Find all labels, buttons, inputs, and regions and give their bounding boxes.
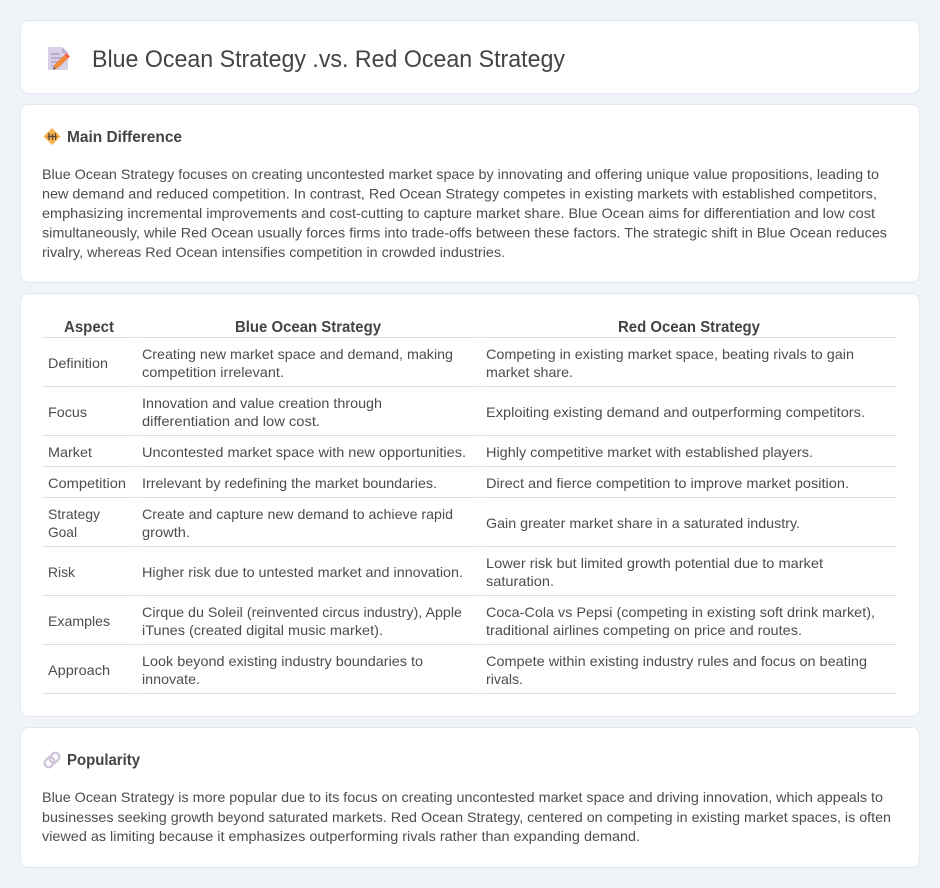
row: definition: Competing in existing market space, beating rivals to gain (486, 346, 854, 362)
panel: comparison table (20, 294, 920, 716)
row: approach: Look beyond existing industry boundaries to (142, 653, 423, 669)
row: strategy goal: Strategy (48, 506, 100, 522)
row: strategy goal: Goal (48, 524, 77, 540)
row: examples (48, 604, 875, 638)
row: strategy goal: Gain greater market share in a saturated industry. (486, 515, 800, 531)
row: focus: Focus (48, 404, 87, 420)
icon: orange diamond sign (44, 128, 60, 145)
table header: Blue Ocean Strategy (235, 319, 381, 336)
row: competition: Irrelevant by redefining the market boundaries. (142, 475, 437, 491)
icon: memo with pencil (48, 47, 70, 70)
row: examples: iTunes (created digital music market). (142, 622, 383, 638)
row: risk: Higher risk due to untested market and innovation. (142, 564, 463, 580)
heading: popularity: Popularity (67, 752, 140, 769)
row: definition: competition irrelevant. (142, 364, 284, 380)
row: strategy goal (48, 506, 800, 540)
row: examples: Cirque du Soleil (reinvented circus industry), Apple (142, 604, 462, 620)
row: market: Market (48, 444, 92, 460)
text block: main difference paragraph: emphasizing incremental improvements and cost-cutting to capture market share. Blue Ocean aims for differentiation and low cost (42, 205, 875, 221)
row: strategy goal: growth. (142, 524, 190, 540)
text block: main difference paragraph: simultaneously, while Red Ocean usually forces firms into trade-offs between these factors. The strategic shift in Blue Ocean reduces (42, 224, 887, 240)
table header: Aspect (64, 319, 115, 336)
icon: chain link (43, 751, 61, 769)
panel: title card (20, 20, 920, 94)
table header: Red Ocean Strategy (618, 319, 760, 336)
row: competition (48, 475, 849, 491)
row: approach: Compete within existing industry rules and focus on beating (486, 653, 867, 669)
row: competition: Competition (48, 475, 126, 491)
panel: main difference (20, 104, 920, 282)
row: examples: Examples (48, 613, 110, 629)
row: approach (48, 653, 867, 687)
row: definition: Definition (48, 355, 108, 371)
row: risk: Risk (48, 564, 76, 580)
text block: main difference paragraph: new demand and reduced competition. In contrast, Red Ocean Strategy competes in existing markets with established competitors, (42, 186, 877, 202)
row: focus: Innovation and value creation through (142, 395, 382, 411)
row: market (48, 444, 813, 460)
row: examples: traditional airlines competing on price and routes. (486, 622, 802, 638)
row: risk: saturation. (486, 573, 554, 589)
title: Blue Ocean Strategy .vs. Red Ocean Strategy (92, 46, 565, 73)
row: market: Highly competitive market with established players. (486, 444, 813, 460)
row: competition: Direct and fierce competition to improve market position. (486, 475, 849, 491)
text block: popularity paragraph: businesses seeking growth beyond saturated markets. Red Ocean Strategy, centered on competing in existing market spaces, is often (42, 809, 891, 825)
text block: main difference paragraph: rivalry, whereas Red Ocean intensifies competition in crowded industries. (42, 244, 505, 260)
text block: popularity paragraph: viewed as limiting because it emphasizes outperforming rivals rather than expanding demand. (42, 828, 640, 844)
row: approach: rivals. (486, 671, 523, 687)
row: focus (48, 395, 865, 429)
row: definition: Creating new market space and demand, making (142, 346, 453, 362)
row: approach: innovate. (142, 671, 200, 687)
row: strategy goal: Create and capture new demand to achieve rapid (142, 506, 453, 522)
heading: main difference: Main Difference (67, 129, 182, 146)
text block: main difference paragraph (42, 166, 887, 260)
table header (64, 319, 760, 336)
row: focus: differentiation and low cost. (142, 413, 320, 429)
row: approach: Approach (48, 662, 110, 678)
text block: main difference paragraph: Blue Ocean Strategy focuses on creating uncontested market space by innovating and offering unique value propositions, leading to (42, 166, 879, 182)
panel: popularity (20, 728, 920, 868)
row: market: Uncontested market space with new opportunities. (142, 444, 466, 460)
row: focus: Exploiting existing demand and outperforming competitors. (486, 404, 865, 420)
text block: popularity paragraph (42, 789, 891, 844)
row: definition: market share. (486, 364, 573, 380)
row: risk (48, 555, 823, 589)
row: examples: Coca-Cola vs Pepsi (competing in existing soft drink market), (486, 604, 875, 620)
row: risk: Lower risk but limited growth potential due to market (486, 555, 823, 571)
row: definition (48, 346, 854, 380)
text block: popularity paragraph: Blue Ocean Strategy is more popular due to its focus on creating uncontested market space and driving innovation, which appeals to (42, 789, 883, 805)
